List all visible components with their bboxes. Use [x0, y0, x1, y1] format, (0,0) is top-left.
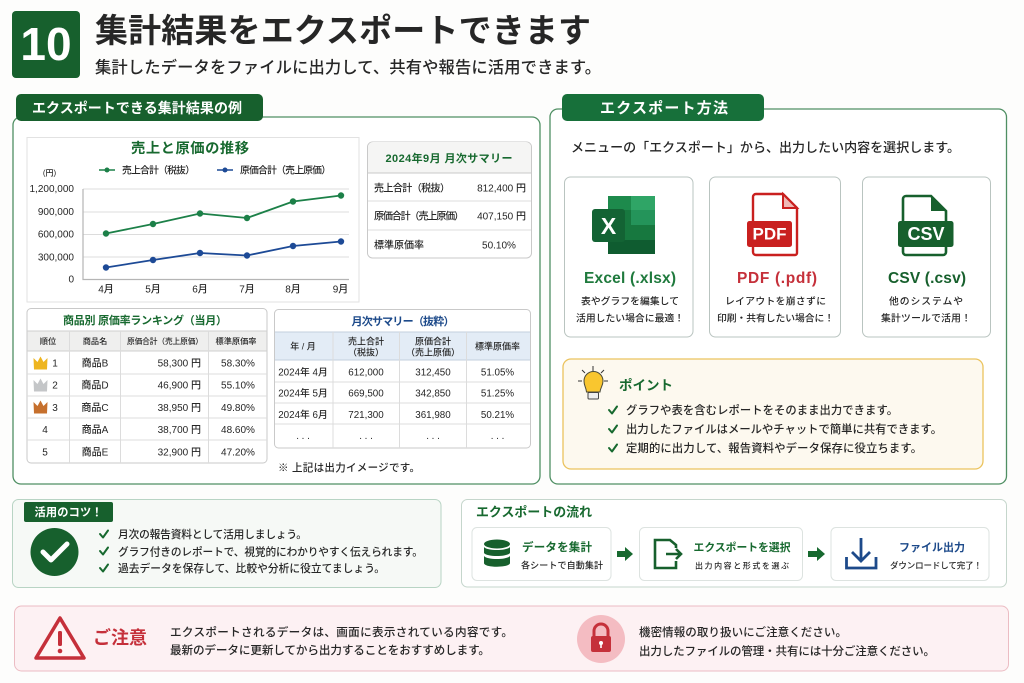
ranking table: 32,900 円 — [158, 448, 201, 458]
line chart card: 売上と原価の推移 — [131, 139, 249, 157]
monthly excerpt table: 月次サマリー（抜粋） — [352, 314, 454, 328]
monthly excerpt table: 標準原価率 — [475, 340, 520, 352]
icon: lock — [577, 615, 625, 663]
chart grid and axes — [83, 189, 349, 280]
chart legend: 売上合計（税抜） — [122, 164, 195, 176]
ranking table: 49.80% — [221, 403, 255, 414]
monthly excerpt table: 361,980 — [415, 410, 451, 421]
step 3 — [831, 528, 989, 580]
card: PDF: 印刷・共有したい場合に！ — [717, 312, 834, 324]
card: PDF: レイアウトを崩さずに — [725, 294, 826, 308]
tips list: グラフ付きのレポートで、視覚的にわかりやすく伝えられます。 — [118, 546, 423, 558]
x axis labels: 7月 — [239, 284, 255, 296]
card: PDF: PDF (.pdf) — [737, 270, 817, 287]
monthly summary card: 407,150 円 — [477, 212, 526, 222]
icon: export file — [655, 540, 681, 568]
monthly summary card: 2024年9月 月次サマリー — [386, 151, 512, 165]
icon: check circle — [30, 528, 78, 576]
monthly summary card: 売上合計（税抜） — [374, 182, 450, 194]
sales line — [103, 192, 344, 237]
monthly excerpt table: . . . — [359, 431, 373, 442]
panel: caution: ご注意 — [93, 627, 147, 648]
monthly excerpt table: （税抜） — [348, 346, 384, 358]
point callout: ポイント — [619, 378, 673, 393]
monthly excerpt table: 売上合計 — [348, 336, 384, 346]
icon: CSV: CSV — [907, 224, 945, 244]
icon: PDF: PDF — [752, 224, 786, 244]
ranking table: 商品D — [81, 378, 109, 392]
x axis labels: 9月 — [333, 284, 348, 296]
ranking table: 58,300 円 — [158, 358, 201, 370]
ranking table: 38,950 円 — [158, 403, 201, 414]
monthly summary card: 50.10% — [482, 240, 516, 252]
icon: PDF — [747, 194, 797, 255]
ranking table: 2 — [52, 380, 58, 392]
y axis labels: 900,000 — [38, 207, 74, 218]
panel: usage tips — [12, 500, 441, 588]
card: Excel — [564, 177, 693, 337]
ranking table: 48.60% — [221, 425, 255, 436]
tips list — [100, 528, 423, 575]
confidentiality text: 機密情報の取り扱いにご注意ください。 — [639, 625, 847, 639]
monthly excerpt table: 669,500 — [348, 388, 384, 400]
step 2: エクスポートを選択 — [694, 540, 791, 554]
monthly excerpt table: 原価合計 — [415, 336, 451, 346]
ranking table — [27, 308, 267, 463]
x axis labels: 5月 — [145, 284, 161, 296]
monthly excerpt table: 612,000 — [348, 368, 384, 378]
confidentiality text: 出力したファイルの管理・共有には十分ご注意ください。 — [639, 644, 935, 658]
icon: Excel: X — [601, 213, 617, 239]
confidentiality text — [639, 625, 935, 658]
y axis labels — [30, 184, 74, 286]
header number badge: 10 — [20, 18, 72, 70]
panel: export flow — [462, 500, 1006, 587]
subtitle: 集計したデータをファイルに出力して、共有や報告に活用できます。 — [95, 58, 601, 77]
x axis labels: 4月 — [98, 284, 114, 296]
title: 集計結果をエクスポートできます — [95, 12, 591, 49]
step 3: ダウンロードして完了！ — [890, 560, 982, 570]
card: PDF — [710, 177, 840, 337]
cost line — [103, 238, 344, 271]
tips list: 過去データを保存して、比較や分析に役立てましょう。 — [118, 562, 385, 575]
x axis labels: 8月 — [285, 284, 301, 296]
heading tab: methods — [562, 94, 764, 121]
monthly excerpt table: 2024年 4月 — [278, 366, 328, 378]
icon: light bulb — [578, 366, 608, 399]
ranking table: 順位 — [40, 336, 56, 346]
monthly excerpt table: 312,450 — [415, 368, 451, 378]
card: Excel: Excel (.xlsx) — [584, 270, 676, 287]
crown: gold — [34, 356, 48, 370]
y axis labels: 0 — [68, 274, 74, 286]
card: Excel: 活用したい場合に最適！ — [576, 312, 684, 324]
arrow 2 — [808, 547, 825, 561]
card: CSV: 他のシステムや — [889, 294, 963, 308]
monthly summary card: 原価合計（売上原価） — [374, 210, 464, 222]
monthly excerpt table: 2024年 5月 — [278, 386, 328, 400]
icon: warning triangle — [36, 618, 84, 658]
monthly excerpt table — [274, 310, 530, 448]
card: CSV — [862, 177, 990, 337]
step 1 — [472, 528, 611, 580]
tips tag — [24, 502, 113, 522]
point callout — [563, 359, 983, 469]
ranking table: 商品B — [82, 356, 109, 370]
check list: 出力したファイルはメールやチャットで簡単に共有できます。 — [626, 422, 942, 436]
arrow 1 — [617, 547, 633, 561]
ranking table: 46,900 円 — [158, 380, 201, 392]
step 1: データを集計 — [522, 540, 592, 554]
y axis labels: 600,000 — [38, 230, 74, 240]
line chart card: (円) — [43, 168, 56, 178]
ranking table: 5 — [42, 448, 48, 458]
ranking table: 58.30% — [221, 358, 255, 370]
x axis labels: 6月 — [192, 284, 208, 296]
icon: CSV — [898, 196, 954, 255]
caution text — [170, 625, 513, 657]
check list: グラフや表を含むレポートをそのまま出力できます。 — [626, 403, 898, 417]
ranking table: 4 — [42, 425, 48, 436]
crown: silver — [34, 378, 48, 392]
caution text: 最新のデータに更新してから出力することをおすすめします。 — [170, 643, 490, 657]
monthly excerpt table: 50.21% — [481, 410, 514, 421]
card: CSV: 集計ツールで活用！ — [881, 312, 971, 324]
panel: export methods — [550, 94, 1006, 484]
card: Excel: 表やグラフを編集して — [581, 294, 679, 308]
check list: 定期的に出力して、報告資料やデータ保存に役立ちます。 — [626, 441, 922, 455]
monthly excerpt table: 721,300 — [348, 410, 384, 421]
icon: download — [846, 538, 876, 568]
crown: bronze — [34, 400, 48, 414]
monthly excerpt table: 年 / 月 — [290, 340, 316, 352]
heading tab: methods: エクスポート方法 — [600, 99, 728, 117]
header number badge — [12, 11, 80, 78]
monthly summary card: 812,400 円 — [477, 184, 526, 194]
monthly excerpt table: 51.05% — [481, 368, 514, 378]
intro text: メニューの「エクスポート」から、出力したい内容を選択します。 — [571, 140, 960, 155]
line chart card — [27, 138, 359, 302]
step 2 — [640, 528, 802, 580]
y axis labels: 1,200,000 — [30, 184, 74, 195]
ranking table: 1 — [52, 358, 58, 370]
monthly excerpt table: （売上原価） — [406, 346, 460, 358]
monthly excerpt table: . . . — [426, 431, 440, 442]
check list — [609, 403, 942, 455]
panel: caution — [14, 606, 1008, 671]
monthly summary card: 標準原価率 — [374, 238, 424, 252]
ranking table: 商品別 原価率ランキング（当月） — [63, 313, 227, 327]
ranking table: 商品名 — [83, 336, 107, 346]
monthly excerpt table: . . . — [296, 431, 310, 442]
ranking table: 38,700 円 — [158, 425, 201, 436]
ranking table: 商品E — [82, 446, 109, 458]
panel: export flow: エクスポートの流れ — [476, 504, 592, 520]
ranking table: 商品A — [82, 423, 109, 436]
tips tag: 活用のコツ！ — [34, 505, 102, 519]
chart legend — [99, 164, 331, 176]
icon: Excel — [592, 196, 655, 254]
step 3: ファイル出力 — [899, 540, 965, 554]
step 2: 出力内容と形式を選ぶ — [695, 560, 789, 570]
monthly summary card — [368, 142, 532, 258]
caution text: エクスポートされるデータは、画面に表示されている内容です。 — [170, 625, 513, 639]
ranking table: 商品C — [81, 401, 109, 414]
chart legend: 原価合計（売上原価） — [240, 164, 331, 176]
x axis labels — [98, 284, 348, 296]
card: CSV: CSV (.csv) — [888, 270, 966, 287]
panel: export examples — [13, 94, 540, 484]
ranking table: 原価合計（売上原価） — [127, 336, 203, 346]
monthly excerpt table: 51.25% — [481, 388, 514, 400]
icon: database — [484, 540, 510, 567]
heading tab: examples: エクスポートできる集計結果の例 — [32, 100, 242, 116]
monthly excerpt table: . . . — [491, 431, 504, 442]
y axis labels: 300,000 — [38, 252, 74, 264]
ranking table: 3 — [52, 403, 58, 414]
step 1: 各シートで自動集計 — [521, 560, 603, 570]
output image note: ※ 上記は出力イメージです。 — [278, 461, 420, 474]
ranking table: 55.10% — [221, 380, 255, 392]
ranking table: 標準原価率 — [216, 336, 256, 346]
monthly excerpt table: 342,850 — [415, 388, 451, 400]
heading tab: examples — [16, 94, 263, 121]
tips list: 月次の報告資料として活用しましょう。 — [118, 528, 307, 541]
ranking table: 47.20% — [221, 448, 255, 458]
monthly excerpt table: 2024年 6月 — [278, 408, 328, 421]
